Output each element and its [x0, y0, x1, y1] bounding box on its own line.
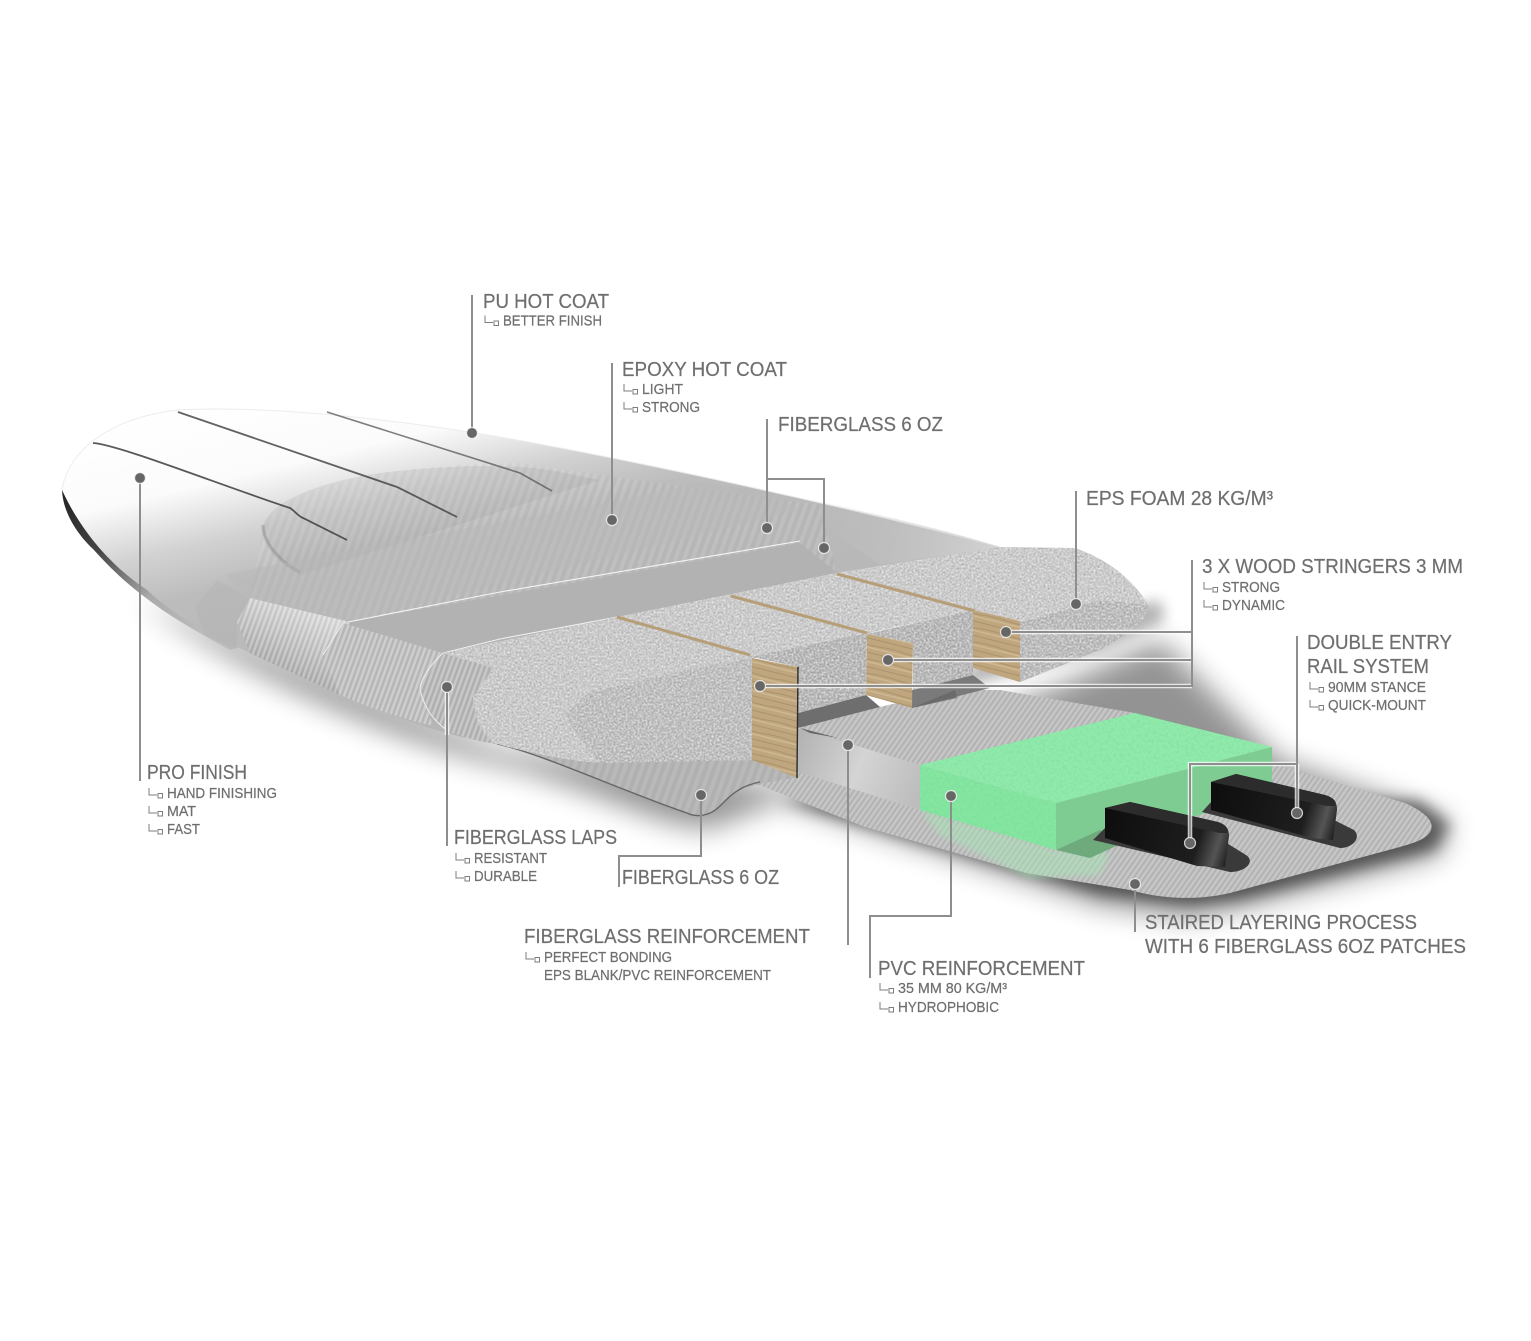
- callout: wood stringers: [754, 556, 1463, 692]
- callout: fiberglass 6 oz, top: FIBERGLASS 6 OZ: [778, 414, 943, 436]
- lap 3: [323, 623, 443, 726]
- callout: PU hot coat: BETTER FINISH: [503, 313, 602, 329]
- lower fiberglass plate: [750, 675, 1432, 898]
- deck patch oval: [263, 466, 600, 575]
- front foam rail face: [566, 658, 752, 763]
- white seam lines: [343, 541, 800, 623]
- callout: fiberglass laps: FIBERGLASS LAPS: [454, 827, 617, 849]
- callout: fiberglass 6 oz, lower: FIBERGLASS 6 OZ: [622, 867, 779, 889]
- stringer 2: [866, 634, 913, 708]
- wood stringers: [617, 574, 1020, 778]
- callout: PU hot coat: PU HOT COAT: [483, 291, 609, 313]
- stringer top edges: [617, 617, 750, 655]
- callout: fiberglass reinforcement: EPS BLANK/PVC REINFORCEMENT: [544, 968, 771, 984]
- epoxy band: [225, 482, 800, 623]
- callout: pro finish: PRO FINISH: [147, 762, 247, 784]
- callout: pro finish: HAND FINISHING: [167, 786, 277, 802]
- foam face, centre-right: [867, 610, 973, 690]
- callout: epoxy hot coat: EPOXY HOT COAT: [622, 359, 787, 381]
- gap shadows under foam: [798, 675, 990, 728]
- callout: fiberglass 6 oz, lower: [619, 790, 779, 889]
- callout: pro finish: [134, 472, 277, 838]
- callout: pro finish: MAT: [167, 804, 196, 820]
- stringer 3: [973, 610, 1020, 682]
- top edge highlight: [62, 409, 1000, 547]
- board underside at the nose: [62, 488, 260, 650]
- front foam block: [443, 617, 783, 763]
- callout: fiberglass reinforcement: FIBERGLASS REINFORCEMENT: [524, 926, 810, 948]
- callout: fiberglass reinforcement: [524, 740, 854, 984]
- hot coat right fade: [780, 493, 1000, 565]
- board top surface: [62, 409, 1000, 738]
- callout: PU hot coat: [466, 291, 609, 438]
- callout: wood stringers: DYNAMIC: [1222, 598, 1285, 614]
- callout: wood stringers: STRONG: [1222, 580, 1280, 596]
- lap 4: [420, 653, 497, 744]
- callout: double entry rail system: QUICK-MOUNT: [1328, 698, 1426, 714]
- lap 2: [237, 598, 350, 695]
- fiberglass band: [343, 543, 837, 653]
- fiberglass laps on the rail: [195, 580, 497, 744]
- icon: double entry rail, front: [1093, 802, 1250, 872]
- fiberglass reinforcement block: [798, 728, 920, 810]
- callout: staired layering process: STAIRED LAYERING PROCESS: [1145, 912, 1417, 934]
- callout: double entry rail system: RAIL SYSTEM: [1307, 656, 1429, 678]
- callout: staired layering process: [1130, 878, 1466, 958]
- callout: fiberglass laps: [442, 682, 617, 885]
- callout: double entry rail system: [1184, 632, 1452, 848]
- callout: double entry rail system: DOUBLE ENTRY: [1307, 632, 1452, 654]
- lap 1: [195, 580, 250, 650]
- grooves: [93, 443, 347, 540]
- callout: PVC reinforcement: 35 MM 80 KG/M³: [898, 981, 1007, 997]
- callout: fiberglass reinforcement: PERFECT BONDING: [544, 950, 672, 966]
- callout: epoxy hot coat: [606, 359, 787, 526]
- EPS foam core: [443, 547, 1148, 763]
- callout: EPS foam: EPS FOAM 28 KG/M³: [1086, 488, 1273, 510]
- callout: double entry rail system: 90MM STANCE: [1328, 680, 1426, 696]
- stringer 1: [752, 658, 798, 778]
- callout: epoxy hot coat: STRONG: [642, 400, 700, 416]
- foam face, centre-left: [752, 633, 867, 713]
- callout: pro finish: FAST: [167, 822, 200, 838]
- callout: fiberglass laps: RESISTANT: [474, 851, 547, 867]
- icon: double entry rail, rear: [1202, 774, 1357, 848]
- callout: wood stringers: 3 X WOOD STRINGERS 3 MM: [1202, 556, 1463, 578]
- board shadow: [140, 600, 1450, 918]
- callout: epoxy hot coat: LIGHT: [642, 382, 683, 398]
- rear foam top surface: [617, 547, 1148, 658]
- hatched deck overlay: [250, 463, 837, 653]
- callout: EPS foam: [1070, 488, 1273, 610]
- callout: staired layering process: WITH 6 FIBERGLASS 6OZ PATCHES: [1145, 936, 1466, 958]
- fiberglass wing under the rail: [497, 744, 797, 816]
- PVC green reinforcement: [920, 713, 1272, 878]
- callout: PVC reinforcement: [870, 790, 1085, 1016]
- callout: fiberglass 6 oz, top: [762, 414, 943, 554]
- callout: fiberglass laps: DURABLE: [474, 869, 537, 885]
- callout: PVC reinforcement: PVC REINFORCEMENT: [878, 958, 1085, 980]
- callout: PVC reinforcement: HYDROPHOBIC: [898, 1000, 999, 1016]
- foam tail face: [1020, 600, 1148, 682]
